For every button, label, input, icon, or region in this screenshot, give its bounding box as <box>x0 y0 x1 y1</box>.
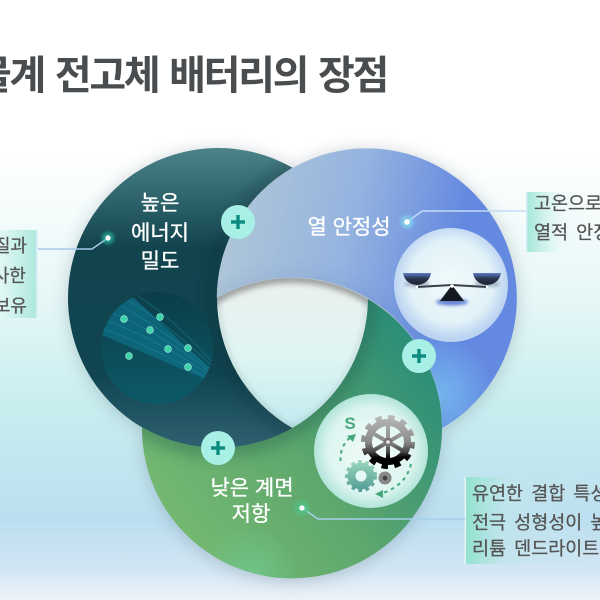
callout: low interface resistance: 리튬 덴드라이트 <box>472 538 599 559</box>
arrowheads <box>347 434 383 498</box>
scale circle <box>394 228 508 342</box>
inner circle: dense particles <box>101 292 214 404</box>
icon: balance scale <box>403 273 501 306</box>
label: high energy density: 에너지 <box>131 222 189 245</box>
green ring: low interface resistance <box>142 299 442 578</box>
icon: small gear <box>347 462 375 490</box>
label: low interface resistance <box>210 477 294 526</box>
connector: bottom callout <box>295 501 465 519</box>
connector: left callout <box>38 232 114 249</box>
plus badge: top <box>221 205 255 239</box>
icon: tiny gear <box>378 472 392 484</box>
label: low interface resistance: 저항 <box>232 503 270 526</box>
letter S: S <box>344 414 356 433</box>
plus badge: right <box>402 339 436 373</box>
dashed rotation arrows <box>340 437 411 494</box>
label: high energy density: 밀도 <box>141 250 179 273</box>
label: high energy density <box>131 192 189 273</box>
label: low interface resistance: 낮은 계면 <box>210 477 294 500</box>
venn soft shadow <box>67 149 518 582</box>
dark ring: high energy density <box>68 148 292 447</box>
callout: high energy density <box>0 230 38 318</box>
callout: thermal stability <box>526 192 600 252</box>
centre hole <box>217 278 368 428</box>
gear circle <box>314 394 428 508</box>
callout: low interface resistance <box>464 477 600 564</box>
connector: right callout <box>400 211 526 228</box>
blue ring: thermal stability <box>216 148 517 428</box>
plus badge: bottom <box>201 431 235 465</box>
label: high energy density: 높은 <box>141 192 179 215</box>
label: thermal stability: 열 안정성 <box>307 216 391 239</box>
icon: big gear <box>364 418 412 466</box>
